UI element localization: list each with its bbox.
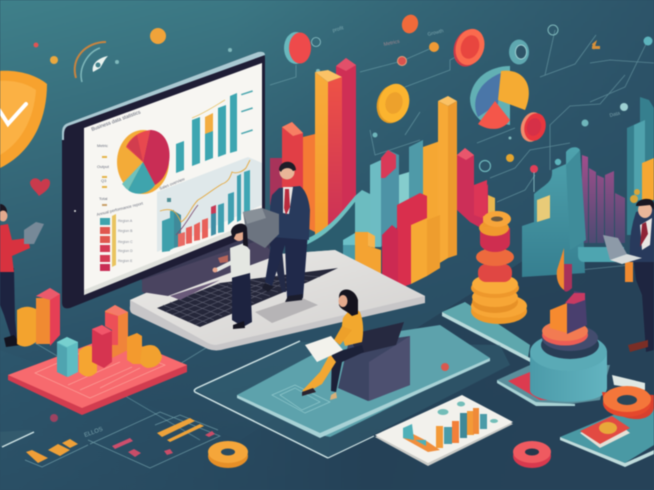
head <box>339 289 358 316</box>
pie legend: Output <box>97 164 110 169</box>
monitor stand <box>140 220 270 300</box>
teal ring <box>509 40 529 64</box>
screen hbar list <box>96 200 144 271</box>
screen hbar list: Annual performance report <box>96 200 144 217</box>
red ring right <box>517 110 549 144</box>
screen line bar panel <box>157 157 262 252</box>
middle bar group <box>343 96 495 289</box>
orange far right bar <box>642 158 654 200</box>
teal far right bars <box>627 97 654 235</box>
red ring bottom <box>513 441 551 468</box>
monitor bezel <box>62 52 265 308</box>
icon: red heart <box>30 178 50 196</box>
icon: gauge <box>75 42 108 82</box>
teal cluster <box>522 147 585 277</box>
bottom left data cards: ELLOS <box>84 427 104 439</box>
glass floor panel <box>194 325 510 458</box>
floating red teal disc <box>284 32 320 73</box>
3D pie chart <box>470 66 529 129</box>
teal ribbon and block <box>304 190 370 285</box>
screen hbar list: Region E <box>118 259 133 263</box>
platform bars <box>57 337 78 377</box>
coin stack <box>471 211 527 324</box>
bottom left data cards <box>0 412 220 468</box>
teal card with red ring and books <box>560 386 654 467</box>
screen hbar list: Region A <box>118 219 133 223</box>
heading microtext: Metrics <box>383 39 401 48</box>
pie legend: Q3 <box>101 178 107 183</box>
heading microtext: Growth <box>427 28 444 38</box>
red ring coin <box>449 25 489 70</box>
panel under coin stack <box>442 302 530 362</box>
red data platform <box>8 305 187 415</box>
report card <box>375 395 513 466</box>
grey folder <box>243 208 279 248</box>
circuit lines <box>30 30 654 440</box>
heading microtext <box>332 25 621 119</box>
legs <box>331 345 364 392</box>
seated woman with yellow sweater <box>302 289 410 401</box>
standing woman <box>212 224 252 329</box>
seat box <box>338 336 410 401</box>
back red and orange bars <box>270 58 356 240</box>
monitor <box>62 52 270 308</box>
document <box>305 336 343 362</box>
orange ring coin <box>372 80 414 127</box>
pie legend <box>97 143 110 206</box>
monitor screen <box>84 63 262 295</box>
screen hbar list: Region D <box>118 249 133 253</box>
screen pie chart <box>117 130 170 194</box>
left bar pair <box>17 288 60 347</box>
podium with blocks <box>530 248 607 402</box>
torso <box>342 310 363 346</box>
center laptop hinge shadow <box>142 240 270 300</box>
small orange dots right <box>630 189 640 203</box>
right teal and purple bar cluster <box>522 97 654 277</box>
orange ring bottom <box>208 441 248 468</box>
mini bars <box>403 402 498 452</box>
screen hbar list: Region B <box>118 229 133 233</box>
screen line bar panel: Sales overview <box>159 176 185 191</box>
monitor screen: Business data statistics <box>91 109 142 133</box>
pie legend: Total <box>99 196 108 201</box>
heading microtext: profit <box>332 25 345 34</box>
purple bars <box>582 155 625 243</box>
screen hbar list: Region C <box>118 240 133 244</box>
man with laptop right <box>603 199 654 352</box>
screen bar chart <box>176 90 253 173</box>
decorative dots top left <box>34 28 232 64</box>
keyboard <box>157 268 338 327</box>
base cards under cylinder <box>497 365 645 406</box>
pie legend: Metric <box>97 143 108 148</box>
small floating coins <box>372 12 652 192</box>
icon: orange shield with check <box>0 71 47 168</box>
trackpad <box>255 297 318 323</box>
woman with tablet left <box>0 204 44 347</box>
man in suit center <box>262 162 310 302</box>
laptop <box>130 250 425 350</box>
heading microtext: Data <box>609 111 621 119</box>
